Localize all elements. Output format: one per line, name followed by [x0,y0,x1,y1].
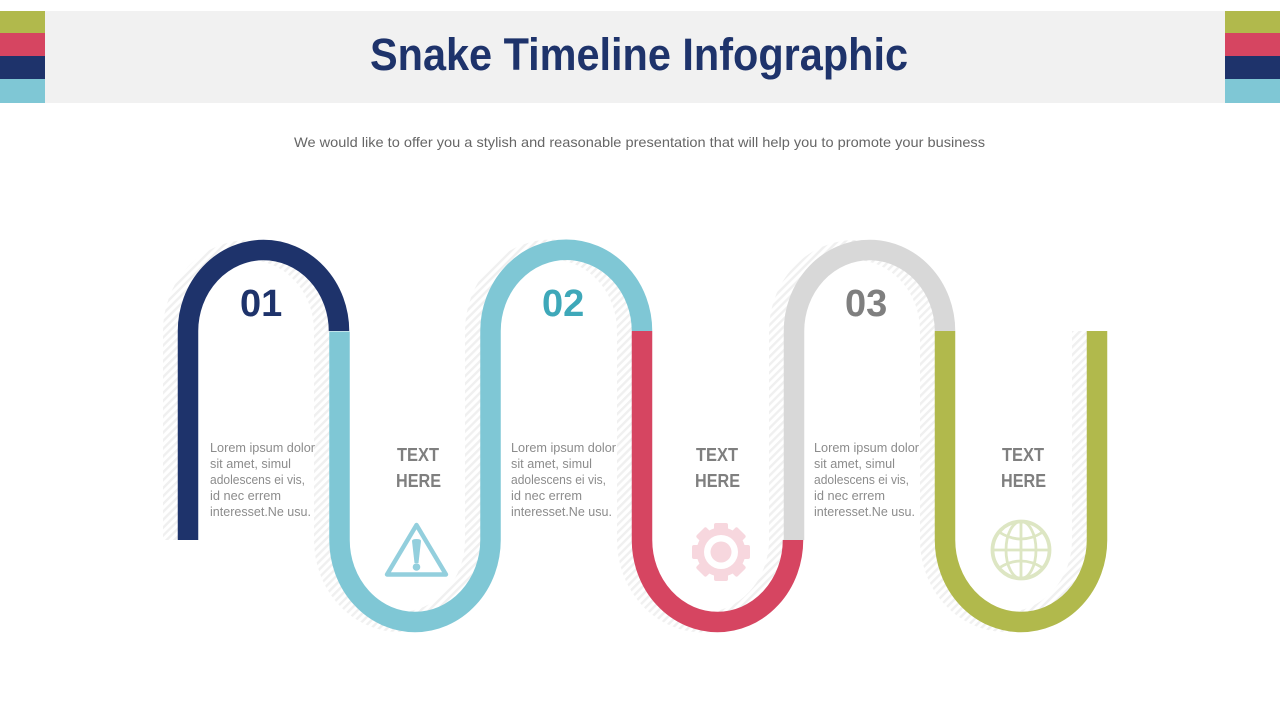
text block 3: id nec errem [814,489,885,503]
left colour stripes [0,11,45,103]
text block 2: Lorem ipsum dolor [511,441,616,455]
label: text here 1 [396,444,441,491]
text block 2: id nec errem [511,489,582,503]
text block 1: sit amet, simul [210,457,291,471]
text block 3: sit amet, simul [814,457,895,471]
label: text here 3: TEXT [1002,444,1045,465]
segment: red curve [642,331,793,622]
subtitle: We would like to offer you a stylish and reasonable presentation that will help you to promote your business [294,134,985,150]
label: text here 1: HERE [396,470,441,491]
text block 2: sit amet, simul [511,457,592,471]
label: text here 3 [1001,444,1046,491]
text block 1: Lorem ipsum dolor [210,441,315,455]
header band [0,11,1280,103]
text block 1 [210,441,315,519]
segment: grey arch [794,250,945,540]
text block 1: id nec errem [210,489,281,503]
label: text here 3: HERE [1001,470,1046,491]
label: text here 1: TEXT [397,444,440,465]
text block 2: interesset.Ne usu. [511,505,612,519]
hatched shadow of the snake [173,249,1082,623]
number 02: 02 [542,283,584,325]
text block 1: adolescens ei vis, [210,473,305,487]
number 01: 01 [240,283,282,325]
icon: warning triangle [387,525,446,574]
text block 3: adolescens ei vis, [814,473,909,487]
text block 2: adolescens ei vis, [511,473,606,487]
segment: navy arch [188,250,339,540]
segment: cyan wave [340,250,642,622]
title: Snake Timeline Infographic [370,29,908,80]
icon: gear [692,523,750,581]
text block 3: Lorem ipsum dolor [814,441,919,455]
icon: globe [992,522,1050,578]
text block 3 [814,441,919,519]
text block 1: interesset.Ne usu. [210,505,311,519]
label: text here 2: HERE [695,470,740,491]
label: text here 2: TEXT [696,444,739,465]
snake timeline ribbon [188,250,1097,622]
number 03: 03 [845,283,887,325]
text block 2 [511,441,616,519]
text block 3: interesset.Ne usu. [814,505,915,519]
right colour stripes [1225,11,1280,103]
label: text here 2 [695,444,740,491]
segment: green curve [945,331,1097,622]
